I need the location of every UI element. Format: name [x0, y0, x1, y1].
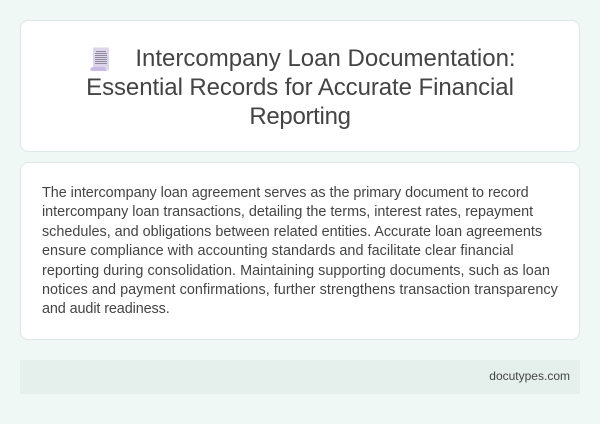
- text block: description: notices and payment confirmations, further strengthens transaction transparency: [42, 282, 558, 298]
- title: Essential Records for Accurate Financial: [86, 74, 514, 101]
- title: Reporting: [249, 103, 351, 130]
- title: [86, 45, 516, 130]
- text block: description: The intercompany loan agreement serves as the primary document to record: [42, 185, 529, 201]
- title: Intercompany Loan Documentation:: [135, 45, 516, 72]
- text block: description: reporting during consolidation. Maintaining supporting documents, such as loan: [42, 263, 550, 279]
- text block: description: ensure compliance with accounting standards and facilitate clear financial: [42, 243, 514, 259]
- text block: description: intercompany loan transactions, detailing the terms, interest rates, repayment: [42, 204, 533, 220]
- text block: description: [42, 185, 558, 317]
- footer text: docutypes.com: [489, 369, 570, 383]
- panel: title card: [20, 20, 580, 152]
- text block: description: schedules, and obligations between related entities. Accurate loan agreements: [42, 224, 542, 240]
- footer: [20, 360, 580, 394]
- panel: description: [20, 162, 580, 340]
- text block: description: and audit readiness.: [42, 301, 170, 317]
- icon: document: [90, 47, 109, 71]
